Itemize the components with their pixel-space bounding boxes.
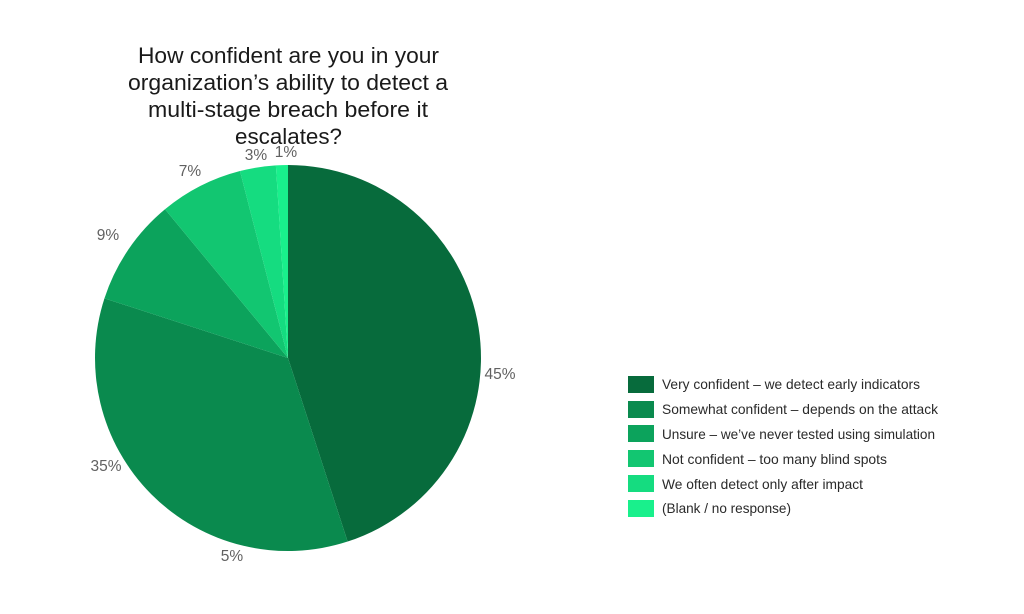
percentage labels: 35% [90,458,122,475]
title: How confident are you in your [138,43,440,68]
slice: somewhat confident 35% [95,298,348,551]
slice: not confident 7% [165,171,288,358]
title: escalates? [235,124,342,149]
percentage labels [90,144,516,565]
legend item: somewhat confident: Somewhat confident – depends on the attack [662,402,938,417]
title [128,43,448,149]
slice: detect after impact 3% [240,165,288,358]
slice: very confident 45% [288,165,481,542]
title: organization’s ability to detect a [128,70,448,95]
legend [628,376,938,517]
percentage labels: 45% [484,366,516,383]
slice: blank 1% [276,165,288,358]
legend item: detect after impact: We often detect only after impact [662,477,863,492]
legend item: not confident: Not confident – too many blind spots [662,452,887,467]
title: multi-stage breach before it [148,97,429,122]
percentage labels: 1% [275,144,297,161]
legend item: blank [628,500,791,517]
legend item: blank: (Blank / no response) [662,501,791,516]
percentage labels: 9% [97,227,119,244]
percentage labels: 5% [221,548,243,565]
percentage labels: 3% [245,147,267,164]
legend item: very confident: Very confident – we detect early indicators [662,377,920,392]
slice: unsure 9% [104,209,288,358]
legend item: unsure: Unsure – we’ve never tested using simulation [662,427,935,442]
percentage labels: 7% [179,163,201,180]
pie chart [95,165,481,551]
